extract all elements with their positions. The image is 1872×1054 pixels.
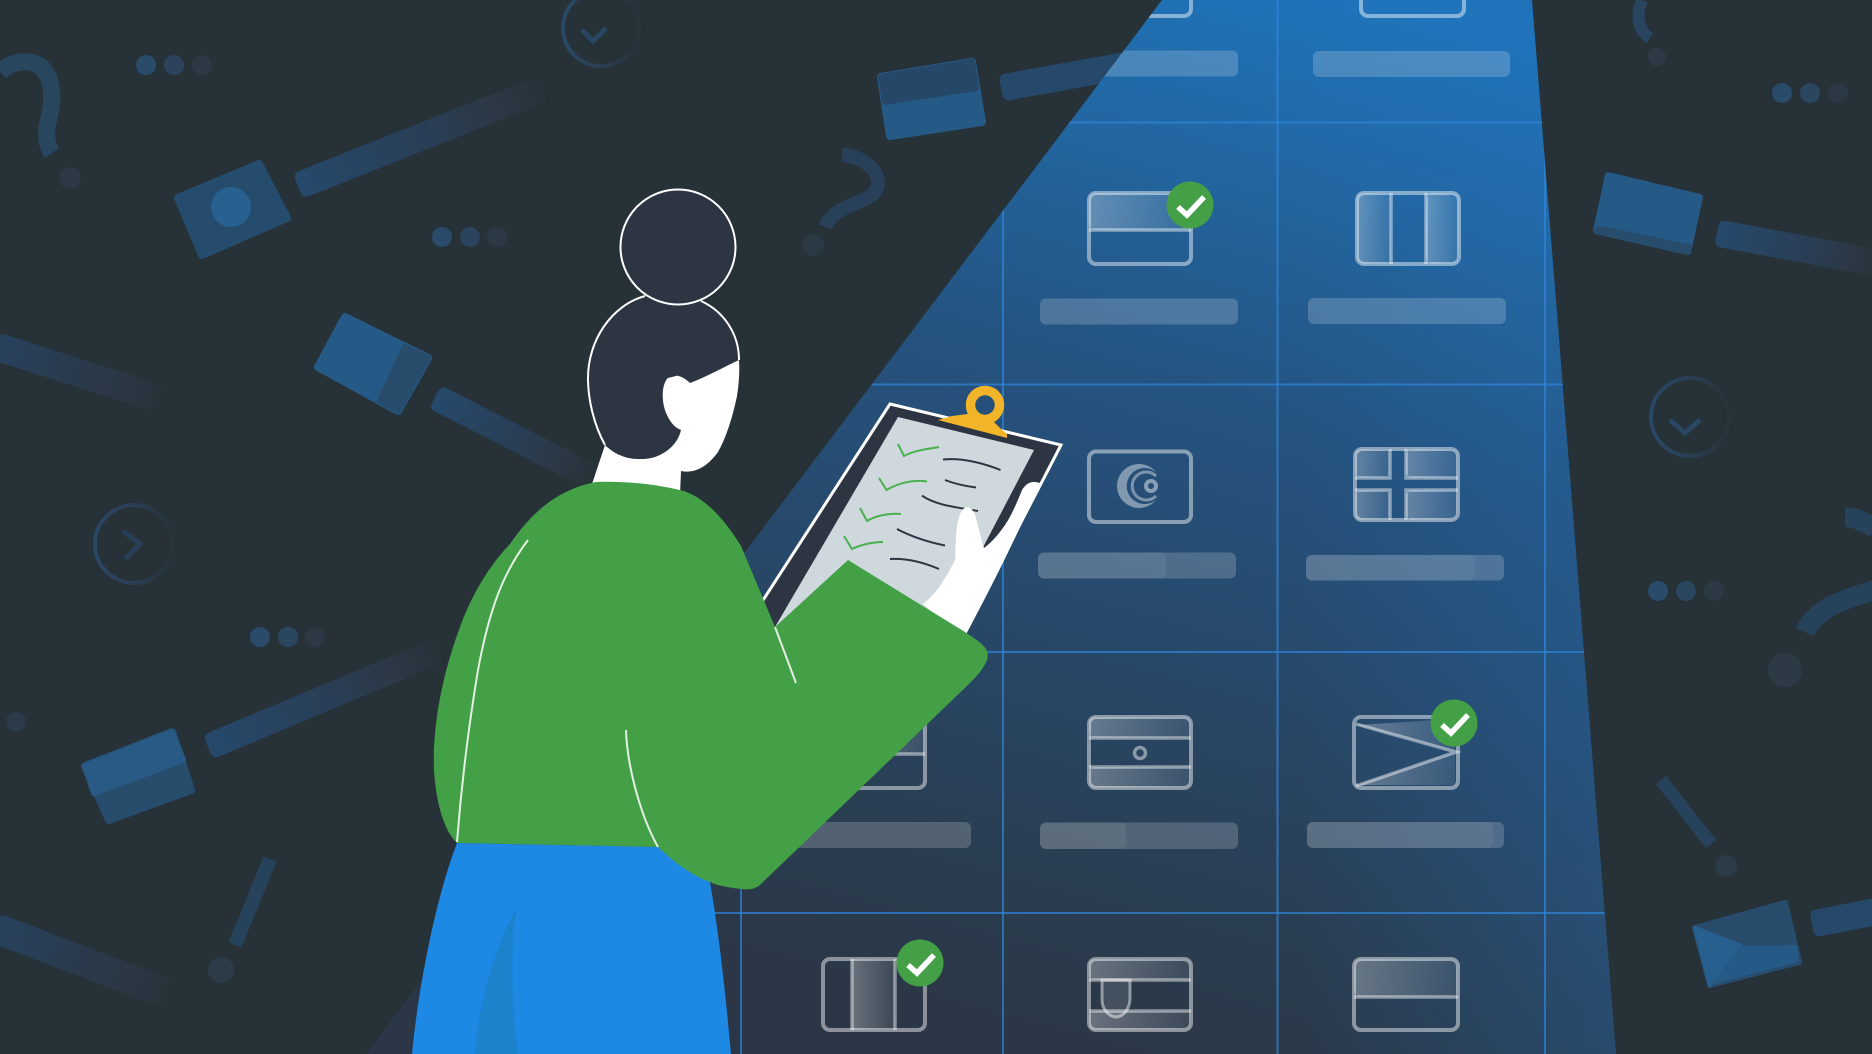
fading bar 5 <box>0 914 174 1008</box>
paper <box>775 417 1034 627</box>
clip <box>938 390 1007 438</box>
clipboard board <box>745 404 1061 640</box>
exclamation mark left <box>208 859 270 983</box>
hair <box>588 296 739 459</box>
card with circle <box>178 164 287 255</box>
check marks on list <box>844 444 939 549</box>
card row 4 col 2 <box>1040 717 1238 849</box>
list lines <box>890 459 1000 569</box>
three dots right 1 <box>1772 83 1848 103</box>
sweater fold lines <box>457 540 796 847</box>
hair bun <box>620 190 736 304</box>
skirt <box>412 843 731 1054</box>
check badge row 4 <box>1430 700 1478 746</box>
card row 3 col 2 crescent <box>1038 452 1236 578</box>
three dots 1 <box>136 55 212 75</box>
card row 5 col 2 <box>1089 959 1191 1030</box>
check circle top <box>563 0 639 66</box>
three dots right 2 <box>1648 581 1724 601</box>
fading bar 6 <box>999 48 1151 101</box>
check badge row 5 <box>896 940 944 986</box>
question mark top right <box>1638 0 1666 66</box>
fading bar 2 <box>0 333 166 413</box>
card row 4 col 3 <box>1307 717 1504 848</box>
fading bar 4 <box>203 638 445 759</box>
spotlight beam <box>366 0 1616 1054</box>
striped card lower left <box>85 732 191 820</box>
striped card <box>318 317 428 411</box>
envelope card right <box>1695 903 1799 985</box>
flag cards grid <box>773 0 1510 1030</box>
question mark top left <box>0 62 81 189</box>
exclamation mark right <box>1661 780 1737 877</box>
fading bar right <box>1715 220 1872 278</box>
fading bar 1 <box>293 75 549 199</box>
card row 2 col 2 <box>1040 193 1238 324</box>
card row 5 col 1 <box>823 959 925 1030</box>
fading bar 3 <box>429 385 597 488</box>
bar right bottom <box>1809 897 1872 937</box>
person <box>412 190 1061 1054</box>
three dots 2 <box>432 227 507 247</box>
check badge row 2 <box>1166 182 1214 228</box>
card row 1 col 3 <box>1313 0 1510 77</box>
card row 3 col 3 cross <box>1306 449 1504 580</box>
sweater <box>434 482 988 889</box>
card row 4 col 1 <box>798 724 971 848</box>
check circle right <box>1651 378 1729 456</box>
three dots 3 <box>250 627 325 647</box>
face and neck <box>590 360 739 495</box>
hand <box>923 482 1040 640</box>
arrow circle <box>95 505 173 583</box>
striped card top centre <box>881 62 982 136</box>
card row 5 col 3 <box>1354 959 1458 1030</box>
grid lines <box>714 0 1605 1054</box>
big question mark right <box>1768 517 1872 687</box>
background doodles left <box>0 0 1151 1008</box>
striped card right <box>1596 175 1700 252</box>
background doodles right <box>1596 0 1872 985</box>
card row 2 col 3 <box>1308 193 1506 324</box>
clipboard <box>745 390 1061 640</box>
question mark centre <box>802 155 878 256</box>
card row 1 col 2 <box>1104 0 1238 76</box>
lone dot <box>6 712 26 732</box>
